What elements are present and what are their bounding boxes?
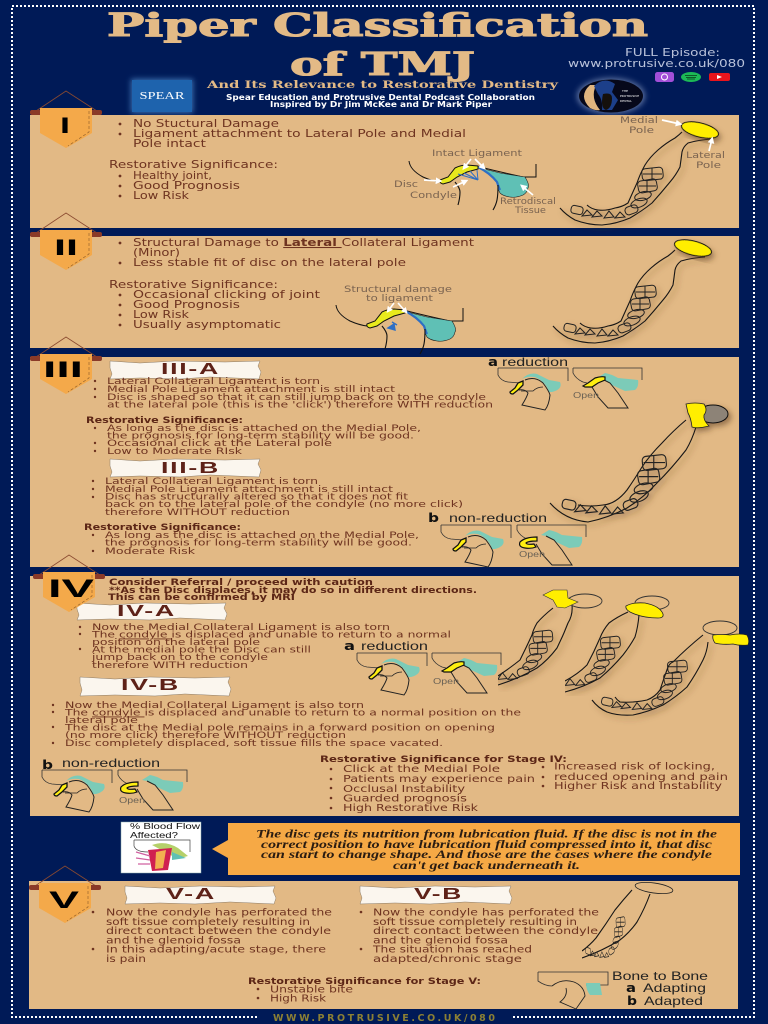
stage V-A text: soft tissue completely resulting in	[106, 917, 310, 928]
stage I text: significance: Restorative Significance:	[109, 159, 278, 171]
mandible diagram	[550, 403, 728, 522]
stage III-B significance: the prognosis for long-term stability will be good.	[105, 538, 412, 548]
mandible diagram	[553, 237, 713, 343]
stage IV-A text: The condyle is displaced and unable to return to a normal	[91, 630, 451, 640]
diagram: reduction	[344, 639, 501, 695]
stage V-B text: direct contact between the condyle	[373, 926, 598, 937]
stage III-B significance	[84, 523, 419, 557]
blood flow image: % Blood Flow	[130, 821, 201, 831]
panel: stage III	[30, 355, 739, 567]
stage IV significance: Increased risk of locking,	[554, 762, 715, 772]
stage IV-A text: therefore WITH reduction	[92, 661, 248, 671]
stage II text: significance	[109, 279, 320, 331]
stage V-B text: The situation has reached	[372, 944, 532, 956]
logo: podcast portrait: PROTRUSIVE	[620, 94, 639, 98]
label: IV-B	[80, 677, 231, 696]
stage III-A text: Disc is shaped so that it can still jump back on to the condyle	[107, 393, 486, 403]
stage III-A significance: As long as the disc is attached on the Medial Pole,	[107, 424, 421, 434]
bone to bone diagram: Adapting	[643, 981, 706, 995]
diagram: non-reduction: Open	[519, 550, 545, 559]
diagram: reduction: reduction	[361, 639, 428, 653]
stage II text: description	[119, 237, 474, 269]
callout: can't get back underneath it.	[393, 860, 580, 872]
full episode link: www.protrusive.co.uk/080	[568, 57, 745, 70]
damaged joint diagram	[336, 284, 463, 354]
label: III-B: III-B	[161, 460, 220, 477]
stage I text: significance: Good Prognosis	[133, 180, 240, 192]
callout: correct position to have lubrication fluid compressed into it, that disc	[261, 839, 712, 851]
label: V-A: V-A	[166, 886, 216, 903]
stage I text: description: No Stuctural Damage	[133, 118, 279, 130]
mandible diagrams	[466, 590, 749, 715]
joint diagram with labels: Tissue	[514, 205, 546, 216]
stage V-A text: is pain	[106, 954, 146, 965]
diagram: reduction: Open	[573, 391, 599, 400]
stage II text: description: Structural Damage to Lateral Collateral Ligament	[133, 237, 474, 249]
stage I text: description: Pole intact	[133, 138, 206, 150]
diagram: reduction: Open	[433, 677, 459, 686]
stage III-B text: therefore WITHOUT reduction	[105, 508, 290, 518]
stage V-A text: direct contact between the condyle	[106, 926, 331, 937]
stage III-A significance: Restorative Significance:	[86, 416, 243, 426]
stage IV-B text	[52, 701, 521, 749]
collaboration credit: Inspired by Dr Jim McKee and Dr Mark Piper	[270, 100, 492, 109]
joint diagram with labels: Intact Ligament	[432, 148, 522, 159]
stage IV referral note: Consider Referral / proceed with caution	[109, 578, 373, 588]
diagram: non-reduction: non-reduction	[62, 756, 160, 770]
stage IV-B text: The disc at the Medial pole remains in a forward position on opening	[64, 724, 495, 734]
diagram: non-reduction: b	[428, 511, 440, 525]
stage II text: significance: Low Risk	[133, 309, 190, 321]
panel: stage IV	[30, 576, 749, 816]
stage II text: significance: Restorative Significance:	[109, 279, 278, 291]
joint diagram with labels: Disc	[394, 179, 418, 190]
stage IV significance: Occlusal Instability	[343, 784, 465, 795]
stage V-A text: In this adapting/acute stage, there	[106, 944, 326, 956]
mandible diagram with pole labels: Pole	[629, 125, 654, 136]
joint diagram with labels	[394, 148, 556, 216]
stage V-A text: Now the condyle has perforated the	[106, 908, 332, 918]
bone to bone diagram	[538, 969, 708, 1009]
full episode link	[568, 46, 745, 70]
diagram: non-reduction: b	[42, 758, 54, 772]
stage IV-B text: Now the Medial Collateral Ligament is also torn	[65, 701, 364, 711]
blood flow image: Affected?	[130, 830, 178, 840]
stage I text: significance: Low Risk	[133, 190, 190, 202]
joint diagram with labels: Retrodiscal	[500, 196, 556, 207]
stage IV referral note	[108, 578, 477, 603]
label: IV-A	[77, 603, 227, 620]
stage IV-B text: lateral pole	[65, 716, 138, 726]
stage I text: significance: Healthy joint,	[133, 170, 212, 182]
stage V-A text	[92, 908, 332, 965]
stage III-A significance: the prognosis for long-term stability will be good.	[107, 432, 414, 442]
icon: spotify	[681, 72, 701, 82]
stage III-B text: Lateral Collateral Ligament is torn	[105, 477, 318, 487]
stage II text: description: (Minor)	[133, 247, 180, 259]
stage IV-A text: jump back on to the condyle	[91, 653, 268, 663]
label: V-B: V-B	[414, 886, 463, 903]
stage V-B text: adapted/chronic stage	[373, 954, 522, 965]
stage III-A significance: Low to Moderate RIsk	[107, 447, 242, 457]
diagram: non-reduction	[42, 756, 187, 812]
banner: III	[30, 337, 102, 394]
icon: youtube	[709, 73, 730, 81]
bone to bone diagram: a	[626, 981, 636, 995]
logo: spear	[131, 79, 193, 113]
callout: can start to change shape. And those are the cases where the condyle	[261, 849, 712, 861]
damaged joint diagram: Structural damage	[344, 284, 452, 295]
mandible diagram with pole labels: Medial	[620, 115, 658, 126]
stage III-B text: Medial Pole Ligament attachment is still intact	[105, 485, 394, 495]
diagram: non-reduction	[428, 511, 586, 567]
stage II text: significance: Good Prognosis	[133, 299, 240, 311]
title: of TMJ	[290, 45, 475, 83]
callout: The disc gets its nutrition from lubrication fluid. If the disc is not in the	[256, 828, 717, 840]
stage IV significance: Click at the Medial Pole	[343, 764, 500, 775]
stage V significance: High Risk	[270, 994, 327, 1004]
stage IV-A text: position on the lateral pole	[92, 638, 260, 648]
joint diagram with labels: Condyle	[410, 190, 457, 201]
stage IV significance: Guarded prognosis	[343, 794, 467, 804]
banner: II	[30, 213, 102, 270]
title	[107, 6, 648, 83]
stage IV referral note: This can be confirmed by MRI	[108, 593, 295, 603]
stage V significance	[248, 977, 481, 1004]
stage I text: significance	[109, 159, 278, 202]
banner: I	[30, 91, 102, 148]
mandible diagram with pole labels: Lateral	[686, 150, 725, 161]
bone to bone diagram: Adapted	[644, 994, 703, 1008]
stage III-A text: at the lateral pole (this is the 'click') therefore WITH reduction	[107, 400, 493, 410]
stage IV significance: High Restorative Risk	[343, 803, 479, 814]
diagram: reduction: reduction	[502, 355, 568, 369]
stage IV referral note: **As the Disc displaces, it may do so in different directions.	[109, 586, 477, 596]
footer url: WWW.PROTRUSIVE.CO.UK/080	[273, 1013, 495, 1024]
banner: IV	[33, 555, 105, 612]
diagram: reduction: a	[488, 355, 498, 369]
diagram: reduction: a	[344, 639, 355, 653]
logo: podcast portrait: THE	[621, 89, 628, 93]
stage IV significance: Higher Risk and Instability	[554, 781, 722, 792]
stage V significance: Unstable bite	[270, 984, 353, 996]
label: V-B	[360, 886, 512, 904]
stage III-B text	[92, 477, 463, 518]
mandible diagram with pole labels: Pole	[696, 160, 721, 171]
stage V-B text: Now the condyle has perforated the	[373, 908, 599, 918]
stage III-B text: back on to the lateral pole of the condyle (no more click)	[105, 500, 463, 510]
stage III-B significance: Restorative Significance:	[84, 523, 241, 533]
banner: III: III	[43, 357, 83, 382]
logo: spear: SPEAR	[140, 90, 185, 102]
collaboration credit: Spear Education and Protrusive Dental Podcast Collaboration	[226, 93, 535, 102]
banner: II: II	[54, 235, 78, 260]
damaged joint diagram: to ligament	[366, 293, 433, 304]
bone to bone diagram: Bone to Bone	[612, 969, 708, 983]
label: V-A	[125, 886, 276, 904]
stage IV-A text	[79, 623, 451, 671]
banner: I: I	[60, 113, 70, 138]
stage IV significance: reduced opening and pain	[554, 772, 728, 783]
stage V-B text	[360, 908, 599, 965]
stage I text: description	[119, 118, 466, 150]
bone to bone diagram: b	[627, 994, 637, 1008]
banner: IV: IV	[48, 575, 95, 603]
label: IV-A: IV-A	[117, 603, 176, 620]
stage III-A significance	[86, 416, 421, 457]
subtitle: And Its Relevance to Restorative Dentistry	[206, 79, 559, 91]
full episode link: FULL Episode:	[625, 46, 720, 59]
stage II text: significance: Occasional clicking of joint	[133, 289, 320, 301]
stage IV significance: Patients may experience pain	[343, 774, 535, 785]
title: Piper Classification	[107, 6, 648, 44]
callout	[212, 823, 740, 875]
stage III-B significance: Moderate Risk	[105, 547, 195, 557]
diagram: non-reduction: Open	[119, 796, 145, 805]
label: IV-B: IV-B	[121, 677, 180, 694]
label: III-A	[110, 361, 261, 379]
stage V-A text: and the glenoid fossa	[106, 936, 241, 946]
stage V-B text: and the glenoid fossa	[373, 936, 508, 946]
diagram: reduction	[488, 355, 642, 410]
stage III-B significance: As long as the disc is attached on the Medial Pole,	[105, 531, 419, 541]
logo: podcast portrait	[577, 78, 645, 114]
stage III-A text: Medial Pole Ligament attachment is still intact	[107, 385, 396, 395]
stage IV-A text: At the medial pole the Disc can still	[92, 646, 311, 656]
stage II text: significance: Usually asymptomatic	[133, 319, 281, 331]
panel: stage I	[30, 115, 739, 228]
banner: V	[29, 866, 101, 923]
label: III-B	[110, 459, 261, 477]
diagram: non-reduction: non-reduction	[449, 511, 547, 525]
stage IV-A text: Now the Medial Collateral Ligament is also torn	[92, 623, 390, 633]
blood flow image	[121, 821, 201, 873]
icon: podcasts	[655, 72, 674, 82]
stage III-A significance: Occasional click at the Lateral pole	[107, 439, 332, 449]
stage V significance: Restorative Significance for Stage V:	[248, 977, 481, 987]
stage IV-B text: The condyle is displaced and unable to return to a normal position on the	[64, 708, 521, 718]
panel: stage V	[29, 880, 738, 1009]
stage IV significance: Restorative Significance for Stage IV:	[320, 755, 567, 765]
banner: V: V	[49, 887, 79, 914]
stage IV-B text: (no more click) therefore WITHOUT reduction	[65, 731, 346, 741]
mandible diagram	[582, 880, 674, 958]
stage IV significance	[320, 755, 728, 814]
stage III-A text: Lateral Collateral Ligament is torn	[107, 377, 320, 387]
stage III-A text	[94, 377, 493, 410]
collaboration credit	[226, 93, 535, 109]
stage IV-B text: Disc completely displaced, soft tissue fills the space vacated.	[65, 739, 443, 749]
stage V-B text: soft tissue completely resulting in	[373, 917, 577, 928]
stage III-B text: Disc has structurally altered so that it does not fit	[105, 492, 409, 502]
label: III-A: III-A	[161, 361, 220, 378]
panel: stage II	[30, 236, 739, 354]
stage I text: description: Ligament attachment to Lateral Pole and Medial	[133, 128, 466, 140]
logo: podcast portrait: DENTAL	[620, 99, 632, 103]
stage II text: description: Less stable fit of disc on the lateral pole	[133, 257, 406, 269]
mandible diagram with pole labels	[560, 115, 725, 225]
